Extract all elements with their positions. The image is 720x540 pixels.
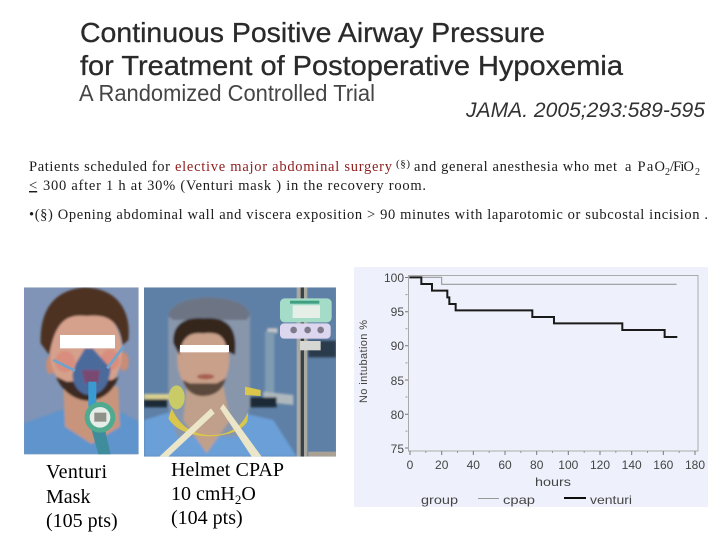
inclusion criteria text: and general anesthesia who met: [414, 159, 617, 175]
label: Helmet CPAP: O: [241, 483, 256, 505]
inclusion criteria text: <: [29, 178, 37, 194]
label: Helmet CPAP: 2: [235, 492, 241, 507]
legend: venturi: [590, 493, 632, 507]
label: Venturi mask: (105 pts): [46, 510, 118, 532]
x axis labels: 80: [530, 458, 544, 472]
title: Continuous Positive Airway Pressure: [80, 17, 545, 48]
y axis labels: 80: [391, 408, 404, 422]
legend: [421, 493, 632, 507]
plot frame: [408, 276, 698, 451]
label: Venturi mask: Mask: [46, 486, 90, 508]
chart background: [354, 267, 708, 507]
x axis labels: 100: [558, 458, 579, 472]
x axis labels: 0: [407, 458, 414, 472]
label: Venturi mask: [46, 461, 118, 532]
inclusion criteria text: (§): [396, 158, 410, 170]
label: Helmet CPAP: (104 pts): [171, 507, 243, 529]
inclusion criteria text: [29, 158, 700, 194]
x axis labels: 140: [622, 458, 642, 472]
title: [80, 17, 623, 81]
footnote: •(§) Opening abdominal wall and viscera exposition > 90 minutes with laparotomic or subcostal incision .: [29, 207, 708, 223]
photo: Venturi mask patient: [24, 287, 139, 454]
eye bar: [180, 345, 229, 352]
inclusion criteria text: elective major abdominal surgery: [175, 159, 393, 175]
y axis labels: 90: [391, 339, 404, 353]
legend: group: [421, 493, 458, 507]
inclusion criteria text: 2: [695, 167, 700, 178]
citation: JAMA. 2005;293:589-595: [465, 99, 705, 122]
x axis labels: 160: [653, 458, 674, 472]
x axis title: hours: [535, 475, 571, 489]
chart: survival curve: [354, 267, 708, 507]
y axis labels: [384, 271, 404, 456]
inclusion criteria text: 2: [665, 167, 670, 178]
y axis labels: 75: [391, 442, 404, 456]
label: Helmet CPAP: Helmet CPAP: [171, 459, 284, 481]
inclusion criteria text: a PaO: [625, 159, 665, 175]
x axis labels: 120: [590, 458, 610, 472]
eye bar: [60, 335, 115, 348]
legend: cpap: [503, 493, 535, 507]
y axis labels: 95: [391, 305, 404, 319]
title: for Treatment of Postoperative Hypoxemia: [80, 50, 623, 81]
inclusion criteria text: /FiO: [670, 159, 694, 175]
label: Venturi mask: Venturi: [46, 461, 107, 483]
label: Helmet CPAP: [171, 459, 284, 529]
x axis labels: [407, 458, 705, 472]
y axis labels: 85: [391, 374, 404, 388]
photo: helmet CPAP patient: [144, 287, 336, 457]
x axis labels: 40: [467, 458, 480, 472]
line: cpap: [409, 277, 677, 284]
axis ticks: [405, 278, 695, 455]
y axis labels: 100: [384, 271, 404, 285]
y axis title: No intubation %: [358, 320, 370, 403]
x axis labels: 180: [685, 458, 705, 472]
inclusion criteria text: 300 after 1 h at 30% (Venturi mask ) in the recovery room.: [43, 178, 426, 194]
subtitle: A Randomized Controlled Trial: [79, 80, 375, 106]
x axis labels: 60: [498, 458, 512, 472]
label: Helmet CPAP: 10 cmH: [171, 483, 235, 505]
x axis labels: 20: [435, 458, 449, 472]
line: venturi: [409, 277, 677, 337]
inclusion criteria text: Patients scheduled for: [29, 159, 170, 175]
